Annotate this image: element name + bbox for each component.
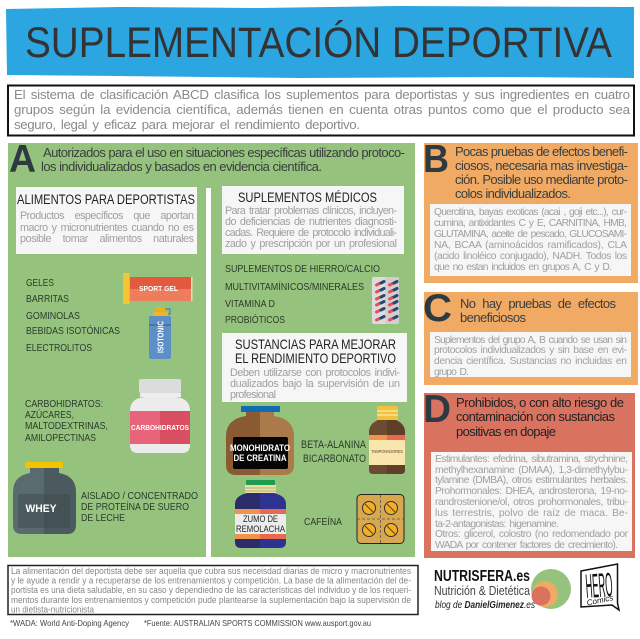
logo: Hero Comics: Comics: [586, 593, 614, 608]
group B substances: Quercitina, bayas exoticas (acai , goji etc...), cur-: [434, 207, 627, 218]
icon: whey jar: [13, 462, 76, 534]
box: alimentos para deportistas: Productos específicos que aportan: [20, 210, 194, 222]
icon: whey jar: WHEY: [26, 503, 57, 515]
list: sports foods: BEBIDAS ISOTÓNICAS: [26, 324, 120, 337]
icon: creatine jar: MONOHIDRATO: [230, 443, 290, 454]
letter C: C: [423, 287, 452, 330]
whey description: AISLADO / CONCENTRADO: [81, 490, 198, 502]
list: sports foods: ELECTROLITOS: [26, 342, 92, 354]
box: suplementos medicos: SUPLEMENTOS MÉDICOS: [238, 190, 377, 205]
group D substances: Estimulantes: efedrina, sibutramina, strychnine,: [435, 454, 628, 465]
box: alimentos para deportistas: [16, 187, 197, 254]
group B substances: [430, 204, 631, 276]
logo: Nutrisfera: Nutrición & Dietética: [434, 583, 531, 598]
list: carbohydrates: [25, 398, 108, 444]
icon: pill blister: [372, 277, 399, 324]
group D substances: [431, 452, 632, 551]
icon: isotonic bottle: [149, 307, 171, 359]
group B description: ción. Posible uso mediante proto-: [455, 172, 628, 187]
list: sports foods: [26, 277, 120, 354]
box: suplementos medicos: zado y prescripción por un profesional: [225, 238, 397, 250]
bottom note box: La alimentación del deportista debe ser aquella que cubra sus neceisdad diarias de micro y macronutrientes: [11, 566, 411, 577]
box: alimentos para deportistas: posible tomar alimentos naturales: [20, 233, 195, 245]
list: medical supplements: [225, 263, 380, 326]
group D description: contaminación con sustancias: [456, 409, 616, 424]
panel: group B: [423, 138, 638, 283]
list: carbohydrates: AMILOPECTINAS: [25, 432, 96, 444]
panel: group C: [423, 287, 638, 385]
label: cafeina: CAFEÍNA: [304, 515, 342, 528]
box: suplementos medicos: Para tratar problemas clínicos, incluyen-: [225, 205, 397, 217]
group C description: No hay pruebas de efectos: [460, 296, 616, 311]
logo: Hero Comics: [581, 564, 619, 610]
list: medical supplements: PROBIÓTICOS: [225, 313, 285, 326]
icon: beet juice bottle: ZUMO DE: [243, 514, 278, 524]
icon: beet juice bottle: [235, 480, 286, 548]
icon: beet juice bottle: REMOLACHA: [236, 524, 285, 534]
whey description: [81, 490, 198, 524]
group C substances: dencia científica. Sustancias no incluidas en: [434, 356, 627, 367]
label: beta-alanina and bicarbonato: BICARBONATO: [303, 453, 366, 465]
group B description: ciosos, necesaria mas investiga-: [455, 158, 628, 173]
group D substances: randrostenione/ol, otros prohormonales, tribu-: [435, 497, 628, 508]
group B description: colos individualizados.: [455, 186, 571, 201]
group B substances: GLUTAMINA, aceite de pescado, GLUCOSAMI-: [434, 229, 627, 240]
icon: buffer bottle: TAMPONADORES: [371, 449, 403, 454]
whey description: DE PROTEÍNA DE SUERO: [81, 500, 189, 513]
letter B: B: [423, 138, 449, 181]
box: alimentos para deportistas: macro y micronutrientes cuando no es: [20, 222, 195, 234]
box: sustancias para mejorar el rendimiento: dualizados bajo la supervisión de un: [230, 378, 400, 390]
whey description: DE LECHE: [81, 512, 125, 524]
letter A: A: [9, 138, 36, 181]
icon: buffer bottle: [369, 406, 405, 474]
group B substances: que no estan incluidos en grupos A, C y D.: [434, 262, 612, 273]
title banner: [6, 6, 634, 78]
group D description: Prohibidos, o con alto riesgo de: [456, 395, 624, 410]
box: suplementos medicos: do deficiencias de nutrientes diagnosti-: [225, 216, 397, 228]
box: suplementos medicos: cadas. Requiere de protocolo individuali-: [225, 227, 397, 239]
group C description: beneficiosos: [460, 310, 526, 325]
panel: group A: [8, 138, 415, 557]
footnote: WADA: *WADA: World Anti-Doping Agency: [10, 618, 130, 628]
letter D: D: [423, 388, 451, 431]
group D description: positivas en dopaje: [456, 424, 556, 439]
group D substances: lus terrestris, polvo de raíz de maca. Be-: [435, 508, 628, 519]
list: medical supplements: SUPLEMENTOS DE HIERRO/CALCIO: [225, 263, 380, 275]
group D substances: Otros: glicerol, colostro (no redomendado por: [435, 529, 629, 540]
box: alimentos para deportistas: ALIMENTOS PARA DEPORTISTAS: [17, 192, 195, 207]
footnote: source: *Fuente: AUSTRALIAN SPORTS COMMISSION www.ausport.gov.au: [144, 618, 371, 628]
bottom note box: un dietista-nutricionista: [11, 604, 95, 616]
list: sports foods: BARRITAS: [26, 293, 69, 305]
group C substances: protocolos individualizados y sin base en evi-: [434, 345, 627, 356]
logo: Nutrisfera: [434, 568, 571, 611]
group D substances: ta-2-antagonistas: higenamine.: [435, 519, 559, 530]
group D substances: methylhexanamine (DMAA), 1,3-dimethylybu-: [435, 465, 628, 476]
box: sustancias para mejorar el rendimiento: profesional: [230, 389, 276, 401]
intro text box: seguro, legal y eficaz para mejorar el rendimiento deportivo.: [14, 117, 360, 132]
group D substances: Prohormonales: DHEA, androsterona, 19-no-: [435, 486, 628, 497]
box: sustancias para mejorar el rendimiento: SUSTANCIAS PARA MEJORAR: [235, 336, 396, 352]
group C substances: grupo D.: [434, 367, 469, 378]
icon: isotonic bottle: ISOTONIC: [156, 321, 166, 353]
group D description: [456, 395, 624, 439]
group B substances: (acido linoléico conjugado), NADH. Todos los: [434, 251, 627, 262]
group B description: [455, 144, 628, 201]
group C description: [460, 296, 616, 325]
group B substances: NA, BCAA (aminoácidos ramificados), CLA: [434, 240, 627, 251]
box: sustancias para mejorar el rendimiento: EL RENDIMIENTO DEPORTIVO: [235, 350, 396, 366]
intro text box: [8, 86, 634, 136]
bottom note box: mentos durante los entrenamientos y competición pude plantearse la suplementación bajo la supervisión de: [11, 595, 411, 606]
group A description: los individualizados y basados en evidencia científica.: [41, 159, 322, 174]
group A description: Autorizados para el uso en situaciones específicas utilizando protoco-: [43, 145, 405, 160]
list: sports foods: GELES: [26, 277, 54, 289]
icon: carbohydrate jar: CARBOHIDRATOS: [131, 423, 189, 432]
group B description: Pocas pruebas de efectos benefi-: [455, 144, 628, 159]
group C substances: [430, 332, 631, 378]
label: beta-alanina and bicarbonato: [301, 439, 367, 465]
box: suplementos medicos: [222, 186, 404, 254]
icon: creatine jar: DE CREATINA: [234, 453, 287, 464]
list: medical supplements: VITAMINA D: [225, 298, 275, 310]
panel: group D: [423, 388, 635, 558]
group D substances: tylamine (DMBA), otros estimulantes herbales.: [435, 475, 628, 486]
box: sustancias para mejorar el rendimiento: [222, 333, 407, 402]
icon: caffeine blister: [357, 494, 404, 544]
group C substances: Suplementos del grupo A, B cuando se usan sin: [434, 335, 627, 346]
box: sustancias para mejorar el rendimiento: Deben utilizarse con protocolos indivi-: [230, 367, 400, 379]
icon: creatine jar: [226, 406, 294, 475]
logo: Nutrisfera: NUTRISFERA.es: [434, 568, 530, 585]
icon: sport gel: [123, 273, 192, 304]
group D substances: WADA por contener factores de crecimiento).: [435, 540, 618, 551]
icon: sport gel: SPORT GEL: [139, 284, 178, 293]
list: carbohydrates: CARBOHIDRATOS:: [25, 398, 103, 410]
logo: Nutrisfera: blog de DanielGimenez.es: [435, 600, 535, 611]
bottom note box: [8, 566, 418, 616]
intro text box: grupos según la evidencia científica, además tienen en cuenta otras puntos como que el producto sea: [14, 102, 631, 117]
icon: carbohydrate jar: [130, 379, 190, 453]
list: sports foods: GOMINOLAS: [26, 310, 80, 322]
group A description: [41, 145, 405, 174]
label: beta-alanina and bicarbonato: BETA-ALANINA: [301, 439, 367, 451]
list: carbohydrates: MALTODEXTRINAS,: [25, 420, 108, 432]
bottom note box: portista es una dieta saludable, en su caso y dependiedno de las características del individuo y de los requeri-: [11, 585, 411, 596]
intro text box: El sistema de clasificación ABCD clasifica los suplementos para deportistas y sus ingredientes en cuatro: [14, 87, 630, 102]
group B substances: cumina, antixidantes C y E, CARNITINA, HMB,: [434, 218, 627, 229]
list: carbohydrates: AZÚCARES,: [25, 408, 74, 421]
list: medical supplements: MULTIVITAMÍNICOS/MINERALES: [225, 280, 364, 293]
bottom note box: y le ayude a rendir y a recuperarse de los entrenamientos y competición. La base de la alimentación del de-: [11, 576, 411, 586]
